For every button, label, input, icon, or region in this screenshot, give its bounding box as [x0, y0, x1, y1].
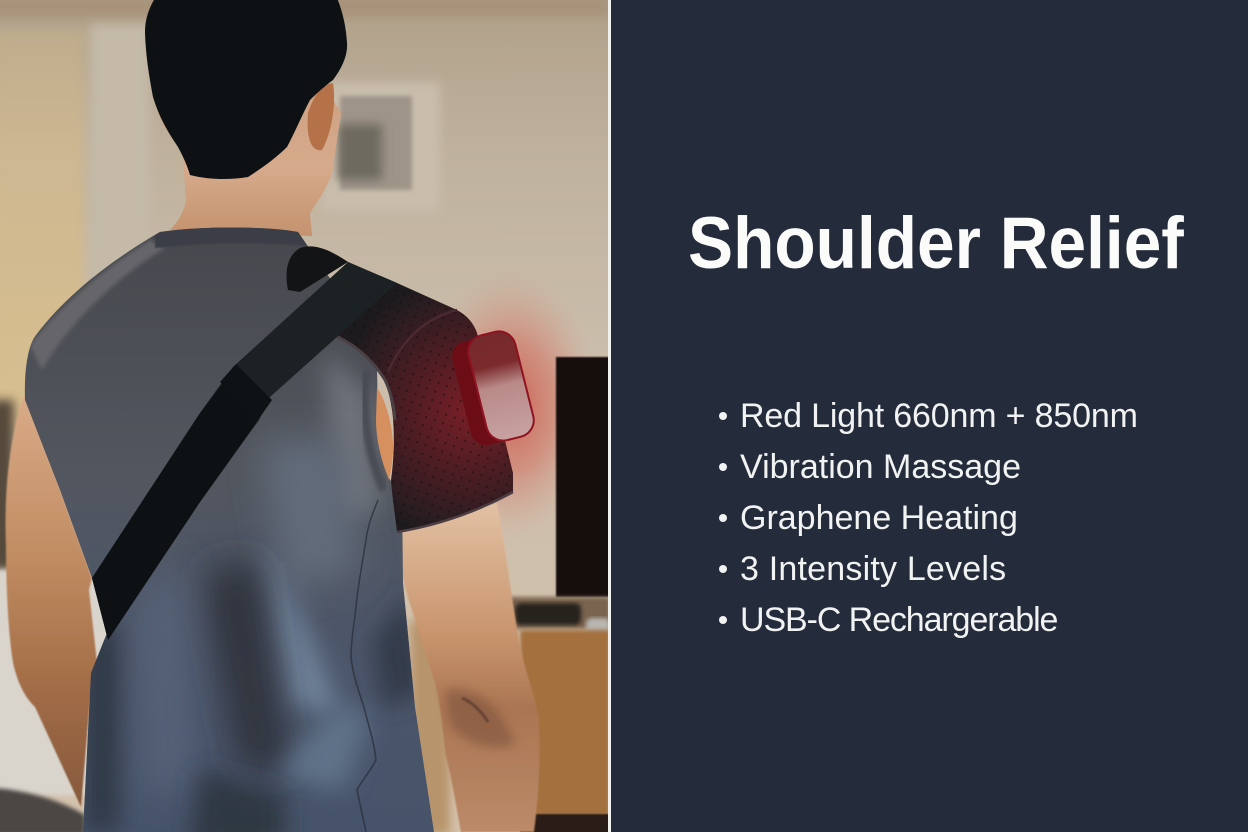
device on sleeve	[449, 328, 537, 448]
divider	[608, 0, 611, 832]
feature: vibration: Vibration Massage	[740, 448, 1021, 486]
red glow	[420, 270, 600, 540]
shirt seam	[351, 500, 378, 832]
room background	[0, 0, 610, 832]
ear	[308, 83, 334, 150]
feature: red light: Red Light 660nm + 850nm	[740, 397, 1138, 435]
feature list	[719, 397, 1138, 639]
photo: man wearing shoulder relief device	[0, 0, 608, 832]
feature: heating: Graphene Heating	[740, 499, 1018, 537]
title: Shoulder Relief	[688, 203, 1184, 284]
strap	[92, 246, 397, 640]
furniture	[505, 357, 610, 832]
armhole skin	[376, 387, 393, 480]
right arm	[396, 503, 540, 832]
hair	[145, 0, 347, 179]
feature: charging: USB-C Rechargerable	[740, 601, 1057, 639]
shirt collar	[155, 226, 308, 248]
shirt folds	[85, 350, 425, 832]
shirt	[24, 228, 434, 832]
feature: intensity: 3 Intensity Levels	[740, 550, 1006, 588]
panel: product details	[611, 0, 1248, 832]
shoulder sleeve	[328, 262, 513, 532]
neck and head skin	[155, 60, 341, 236]
left arm	[6, 395, 97, 807]
shirt sleeve highlight	[30, 240, 165, 370]
